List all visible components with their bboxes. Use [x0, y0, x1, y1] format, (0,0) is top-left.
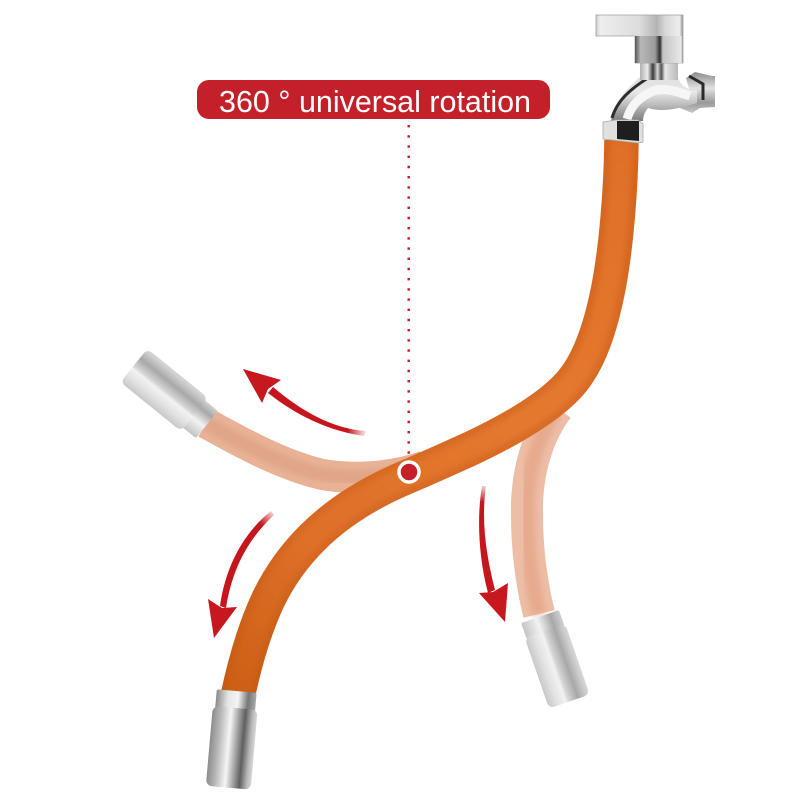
faucet [596, 15, 715, 143]
faded nozzle: upper left [120, 349, 220, 441]
main nozzle [206, 689, 259, 790]
fitting shadow [689, 76, 703, 100]
spout highlight [627, 89, 690, 119]
pipe fitting [680, 72, 715, 113]
arrow: lower right [479, 486, 508, 622]
faded hose: lower right [520, 408, 590, 709]
faded hose: upper left [120, 349, 425, 477]
hex nut [603, 120, 643, 143]
faded nozzle: lower right [520, 609, 590, 709]
faucet neck [640, 63, 678, 80]
arrow: upper left [243, 369, 366, 436]
arrow: lower left [208, 511, 274, 638]
callout line [408, 125, 410, 461]
nut dark face [617, 121, 639, 141]
faucet body [611, 63, 697, 121]
handle [596, 15, 683, 63]
spout reflection [612, 78, 648, 118]
main orange hose [238, 140, 622, 695]
callout label: 360 ° universal rotation [219, 84, 531, 119]
handle stem [635, 36, 683, 63]
rotation marker [399, 462, 419, 482]
